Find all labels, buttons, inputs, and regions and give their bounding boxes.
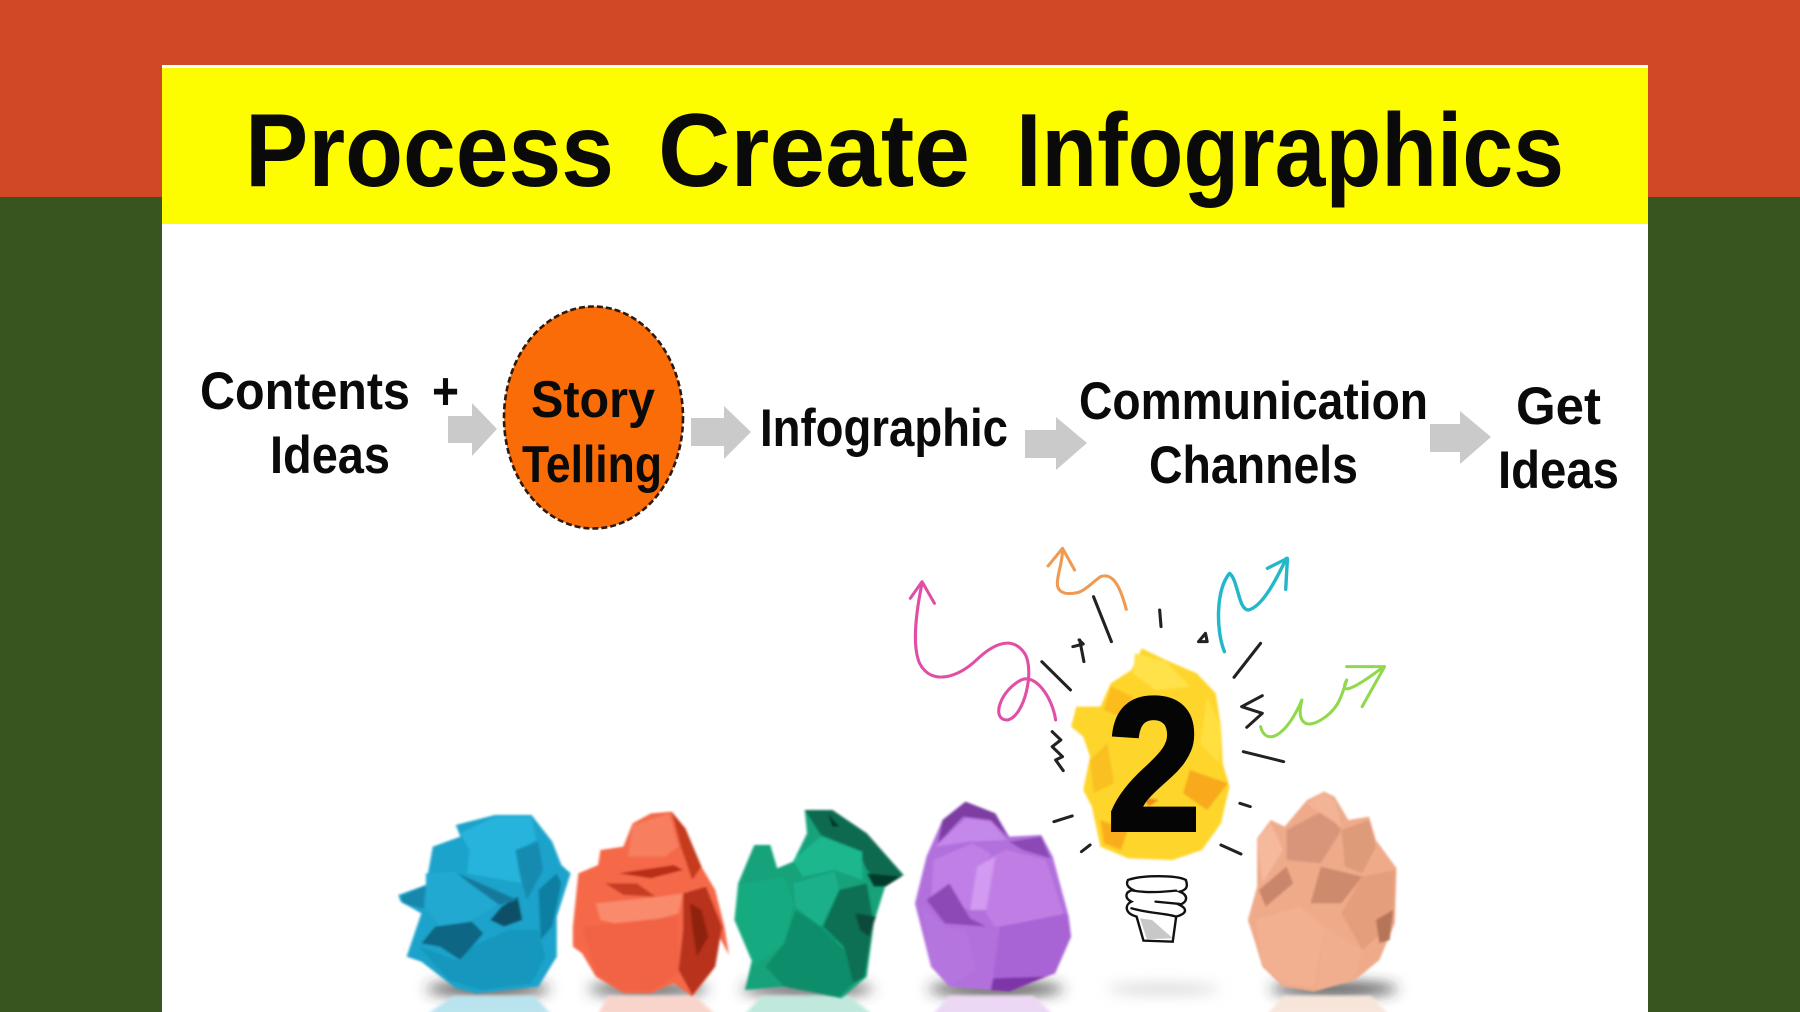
title: Create: [658, 93, 970, 209]
panel: white slide: [162, 65, 1648, 1012]
illustration: crumpled paper row: [398, 548, 1398, 1012]
title: [245, 93, 1564, 209]
step: Contents + Ideas: +: [432, 362, 459, 421]
arrow: cyan: [1218, 558, 1287, 652]
title banner: [162, 68, 1648, 224]
sketched arrows and rays: [910, 548, 1385, 854]
step: Get Ideas: Get: [1516, 377, 1601, 436]
paper ball shadows: [426, 983, 1398, 995]
paper ball reflections: [427, 996, 1388, 1012]
paper ball: blue: [398, 815, 571, 993]
arrow: channels to get ideas: [1430, 411, 1491, 464]
light rays: [1042, 597, 1284, 854]
paper ball: purple: [915, 802, 1071, 992]
arrow: orange: [1048, 548, 1126, 609]
arrow: pink: [910, 582, 1056, 720]
arrow: contents to story telling: [448, 403, 497, 456]
title: Infographics: [1016, 93, 1564, 209]
arrow: infographic to channels: [1025, 417, 1087, 470]
number 2: 2: [1107, 659, 1201, 871]
paper ball: red: [573, 812, 729, 997]
step: Contents + Ideas: Contents: [200, 362, 410, 421]
step: Get Ideas: [1498, 377, 1619, 500]
step: Contents + Ideas: [200, 362, 459, 485]
bulb: screw base: [1126, 876, 1187, 942]
title: Process: [245, 93, 614, 209]
arrow: story telling to infographic: [691, 406, 751, 459]
step: Get Ideas: Ideas: [1498, 441, 1619, 500]
step: Story Telling oval: Telling: [522, 436, 662, 494]
paper ball: peach: [1248, 792, 1397, 992]
step: Story Telling oval: [504, 306, 683, 528]
step: Contents + Ideas: Ideas: [270, 426, 390, 485]
step: Infographic: Infographic: [760, 399, 1008, 458]
step: Communication Channels: Communication: [1079, 372, 1428, 431]
paper ball: green: [735, 810, 903, 998]
step: Communication Channels: Channels: [1149, 436, 1358, 495]
step: Story Telling oval: Story: [531, 371, 655, 429]
paper lightbulb: [1071, 648, 1230, 942]
background: top red band: [0, 0, 1800, 197]
bulb: yellow crumpled paper: [1071, 648, 1230, 860]
arrow: green: [1261, 667, 1385, 737]
step: Communication Channels: [1079, 372, 1428, 495]
